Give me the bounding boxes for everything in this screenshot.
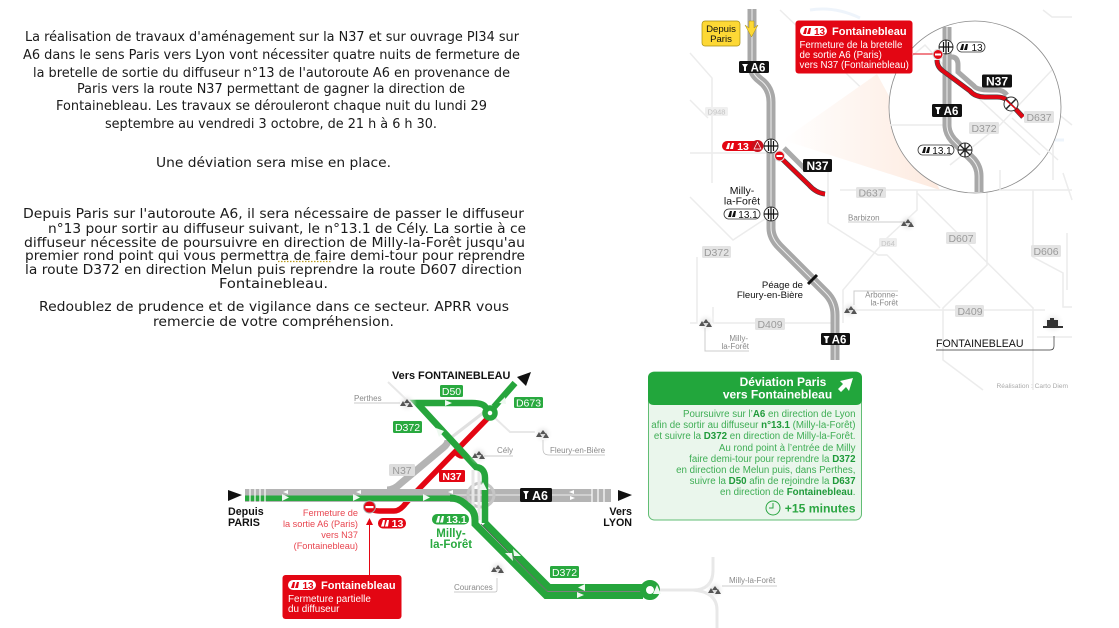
intro text block: La réalisation de travaux d'aménagement sur la N37 et sur ouvrage PI34 sur <box>25 30 520 45</box>
grey road labels: D409 <box>757 319 783 331</box>
route description text block: Fontainebleau. <box>219 277 328 292</box>
callout: closure of ramp: Fermeture de la bretelle <box>800 40 902 51</box>
route description text block <box>23 207 526 292</box>
green road labels: D673 <box>516 398 541 410</box>
callout: partial closure: Fontainebleau <box>321 580 396 592</box>
caution text block <box>39 300 509 330</box>
grey N37 road <box>387 413 483 490</box>
no entry marker and closure note: la sortie A6 (Paris) <box>283 519 358 529</box>
extra time: +15 minutes <box>785 502 856 516</box>
callout: closure of ramp: 13 <box>814 27 825 38</box>
background road network <box>690 10 1072 390</box>
town: Milly-la-Forêt: Milly- <box>729 334 748 343</box>
circle: D637 label: D637 <box>1026 112 1052 124</box>
credit: Réalisation : Carto Diem <box>997 383 1068 390</box>
route description text block: Depuis Paris sur l'autoroute A6, il sera nécessaire de passer le diffuseur <box>23 207 525 222</box>
intro text block: Fontainebleau. Les travaux se dérouleront chaque nuit du lundi 29 <box>56 99 487 114</box>
green road labels: D372 <box>395 422 420 434</box>
label: N37: N37 <box>806 159 829 173</box>
end arrow: Vers Lyon: Vers <box>609 506 632 518</box>
green diversion route <box>417 383 657 597</box>
A6 motorway <box>752 9 835 360</box>
grey road labels: D607 <box>948 233 974 245</box>
interchange loops <box>468 470 494 520</box>
grey road labels <box>702 107 1061 331</box>
intro text block: la bretelle de sortie du diffuseur n°13 de l'autoroute A6 en provenance de <box>33 66 510 81</box>
panel instructions: afin de sortir au diffuseur n°13.1 (Milly-la-Forêt) <box>651 420 856 431</box>
intro text block: A6 dans le sens Paris vers Lyon vont nécessiter quatre nuits de fermeture de <box>23 48 520 63</box>
grey road labels: D606 <box>1033 246 1059 258</box>
intro text block <box>23 30 520 132</box>
circle: N37 label: N37 <box>986 74 1008 88</box>
toll: Péage de Fleury-en-Bière <box>737 275 817 301</box>
arrow to closure <box>366 518 373 575</box>
caution text block: Redoublez de prudence et de vigilance dans ce secteur. APRR vous <box>39 300 509 315</box>
panel instructions: en direction de Fontainebleau. <box>720 487 856 498</box>
map: diversion <box>228 370 777 628</box>
panel header: Déviation Paris <box>740 375 827 389</box>
label: exit 13 with warning <box>722 140 764 153</box>
motorway lane arrows <box>283 490 575 500</box>
green road labels: D372 <box>552 567 577 579</box>
start arrow: Depuis Paris: Depuis <box>228 506 264 518</box>
label: Milly-la-Forêt and exit 13.1: Milly- <box>730 185 755 197</box>
towns: Milly-la-Forêt <box>729 576 776 585</box>
green road labels: D50 <box>442 386 461 398</box>
panel instructions <box>651 409 856 498</box>
route description text block: la route D372 en direction Melun puis reprendre la route D607 direction <box>25 263 522 278</box>
N37 labels <box>389 464 465 483</box>
town: Milly-la-Forêt: la-Forêt <box>721 342 750 351</box>
callout: closure of ramp <box>796 20 912 74</box>
circle: D372 label: D372 <box>971 123 997 135</box>
callout: closure of ramp: Fontainebleau <box>832 26 907 38</box>
circle: no entry <box>913 50 943 60</box>
towns: Perthes <box>354 394 382 403</box>
direction arrows on route <box>282 397 661 598</box>
grey road labels: D372 <box>704 247 729 259</box>
intro text block: Paris vers la route N37 permettant de gagner la direction de <box>77 82 465 97</box>
label: Milly-la-Forêt and exit 13.1 <box>724 185 778 221</box>
toll: Péage de Fleury-en-Bière: Péage de <box>762 280 803 291</box>
label: A6 top <box>739 61 769 74</box>
circle: interchange 13 label <box>939 40 985 54</box>
N37 labels: N37 <box>442 471 462 483</box>
label: Milly-la-Forêt and exit 13.1: la-Forêt <box>724 196 760 208</box>
exit 13 badge: 13 <box>392 518 403 530</box>
zoom circle <box>889 21 1061 193</box>
arrow and title: Vers Fontainebleau <box>392 370 531 386</box>
towns <box>354 393 777 600</box>
sign: Depuis Paris <box>702 21 758 46</box>
circle: A6 label: A6 <box>944 106 958 118</box>
no entry marker and closure note: Fermeture de <box>303 508 358 518</box>
panel instructions: Au rond point à l’entrée de Milly <box>719 443 856 454</box>
town: Arbonne-la-Forêt: Arbonne- <box>865 290 898 300</box>
route description text block: premier rond point qui vous permettra de faire demi-tour pour reprendre <box>25 249 525 264</box>
N37 labels: N37 <box>392 465 412 477</box>
route description text block: diffuseur nécessite de poursuivre en direction de Milly-la-Forêt jusqu'au <box>24 236 525 251</box>
label: exit 13 with warning: 13 <box>737 141 749 153</box>
end arrow: Vers Lyon: LYON <box>603 517 632 529</box>
start arrow: Depuis Paris: PARIS <box>228 517 260 529</box>
towns: Courances <box>454 583 493 592</box>
panel header <box>648 372 862 405</box>
panel header: vers Fontainebleau <box>723 388 832 402</box>
end arrow: Vers Lyon <box>603 490 632 529</box>
grey road labels: D409 <box>957 306 983 318</box>
panel instructions: et suivre la D372 en direction de Milly-la-Forêt. <box>654 431 856 442</box>
label: A6 bottom: A6 <box>832 334 846 346</box>
exit 13 badge <box>378 518 406 530</box>
towns: Fleury-en-Bière <box>550 446 606 455</box>
red closed ramp <box>369 418 488 511</box>
callout: partial closure: du diffuseur <box>288 604 340 615</box>
no entry marker and closure note: (Fontainebleau) <box>294 541 358 551</box>
arrow and title: Vers Fontainebleau: Vers FONTAINEBLEAU <box>392 370 511 382</box>
sign: Depuis Paris: Depuis <box>706 24 736 35</box>
town: Arbonne-la-Forêt: la-Forêt <box>870 298 899 308</box>
town: Barbizon: Barbizon <box>848 214 880 222</box>
no entry marker and closure note: vers N37 <box>321 530 358 540</box>
town: Milly-la-Forêt <box>696 313 750 351</box>
circle: interchange 13 label: 13 <box>971 43 983 54</box>
grey background roads <box>388 382 717 628</box>
water hints <box>810 9 1064 140</box>
callout: partial closure: Fermeture partielle <box>288 594 371 605</box>
circle: exit 13.1 <box>918 143 972 157</box>
label: A6 bottom <box>821 333 850 346</box>
sign: Depuis Paris: Paris <box>710 34 732 45</box>
exit 13.1 and Milly label: la-Forêt <box>430 539 472 551</box>
label: Milly-la-Forêt and exit 13.1: 13.1 <box>738 210 758 221</box>
circle: A6 label <box>932 104 962 118</box>
green road labels <box>393 385 579 579</box>
deviation notice text: Une déviation sera mise en place. <box>156 156 391 171</box>
panel instructions: faire demi-tour pour reprendre la D372 <box>689 454 856 465</box>
intro text block: septembre au vendredi 3 octobre, de 21 h à 6 h 30. <box>105 117 437 132</box>
exit 13.1 and Milly label: 13.1 <box>446 514 467 526</box>
town: Barbizon <box>848 213 918 233</box>
exit 13.1 and Milly label <box>430 514 472 551</box>
zoom wedge <box>783 74 940 190</box>
A6 shield <box>520 488 552 503</box>
route description text block: n°13 pour sortir au diffuseur suivant, le n°13.1 de Cély. La sortie à ce <box>48 222 526 237</box>
A6 shield: A6 <box>532 489 548 503</box>
panel: deviation Paris to Fontainebleau <box>648 372 862 520</box>
grey road labels: D64 <box>881 239 895 248</box>
grey road labels: D637 <box>858 188 884 200</box>
callout: partial closure: 13 <box>302 581 314 592</box>
A6 motorway band <box>245 488 611 502</box>
start arrow: Depuis Paris <box>228 490 264 529</box>
city: Fontainebleau: FONTAINEBLEAU <box>936 338 1024 350</box>
N37 closed ramp <box>780 148 825 194</box>
town: Arbonne-la-Forêt <box>840 290 899 320</box>
panel instructions: en direction de Melun puis, dans Perthes, <box>676 465 856 476</box>
circle: closed junction icon <box>1004 97 1018 111</box>
callout: closure of ramp: vers N37 (Fontainebleau) <box>800 60 909 71</box>
caution text block: remercie de votre compréhension. <box>153 315 394 330</box>
city: Fontainebleau <box>936 311 1065 350</box>
callout: partial closure <box>282 575 402 619</box>
exit 13.1 and Milly label: Milly- <box>436 528 466 540</box>
panel instructions: Poursuivre sur l’A6 en direction de Lyon <box>683 409 856 420</box>
panel instructions: suivre la D50 afin de rejoindre la D637 <box>690 476 856 487</box>
circle: exit 13.1: 13.1 <box>932 146 952 157</box>
icon: no entry <box>774 151 784 161</box>
callout: closure of ramp: de sortie A6 (Paris) <box>800 50 882 61</box>
icon: interchange 13 <box>764 139 778 153</box>
label: A6 top: A6 <box>751 62 765 74</box>
toll: Péage de Fleury-en-Bière: Fleury-en-Bière <box>737 290 803 301</box>
no entry marker and closure note <box>283 501 376 551</box>
towns: Cély <box>497 446 513 455</box>
map: overview of closure <box>690 9 1072 390</box>
grey road labels: D948 <box>708 108 725 116</box>
